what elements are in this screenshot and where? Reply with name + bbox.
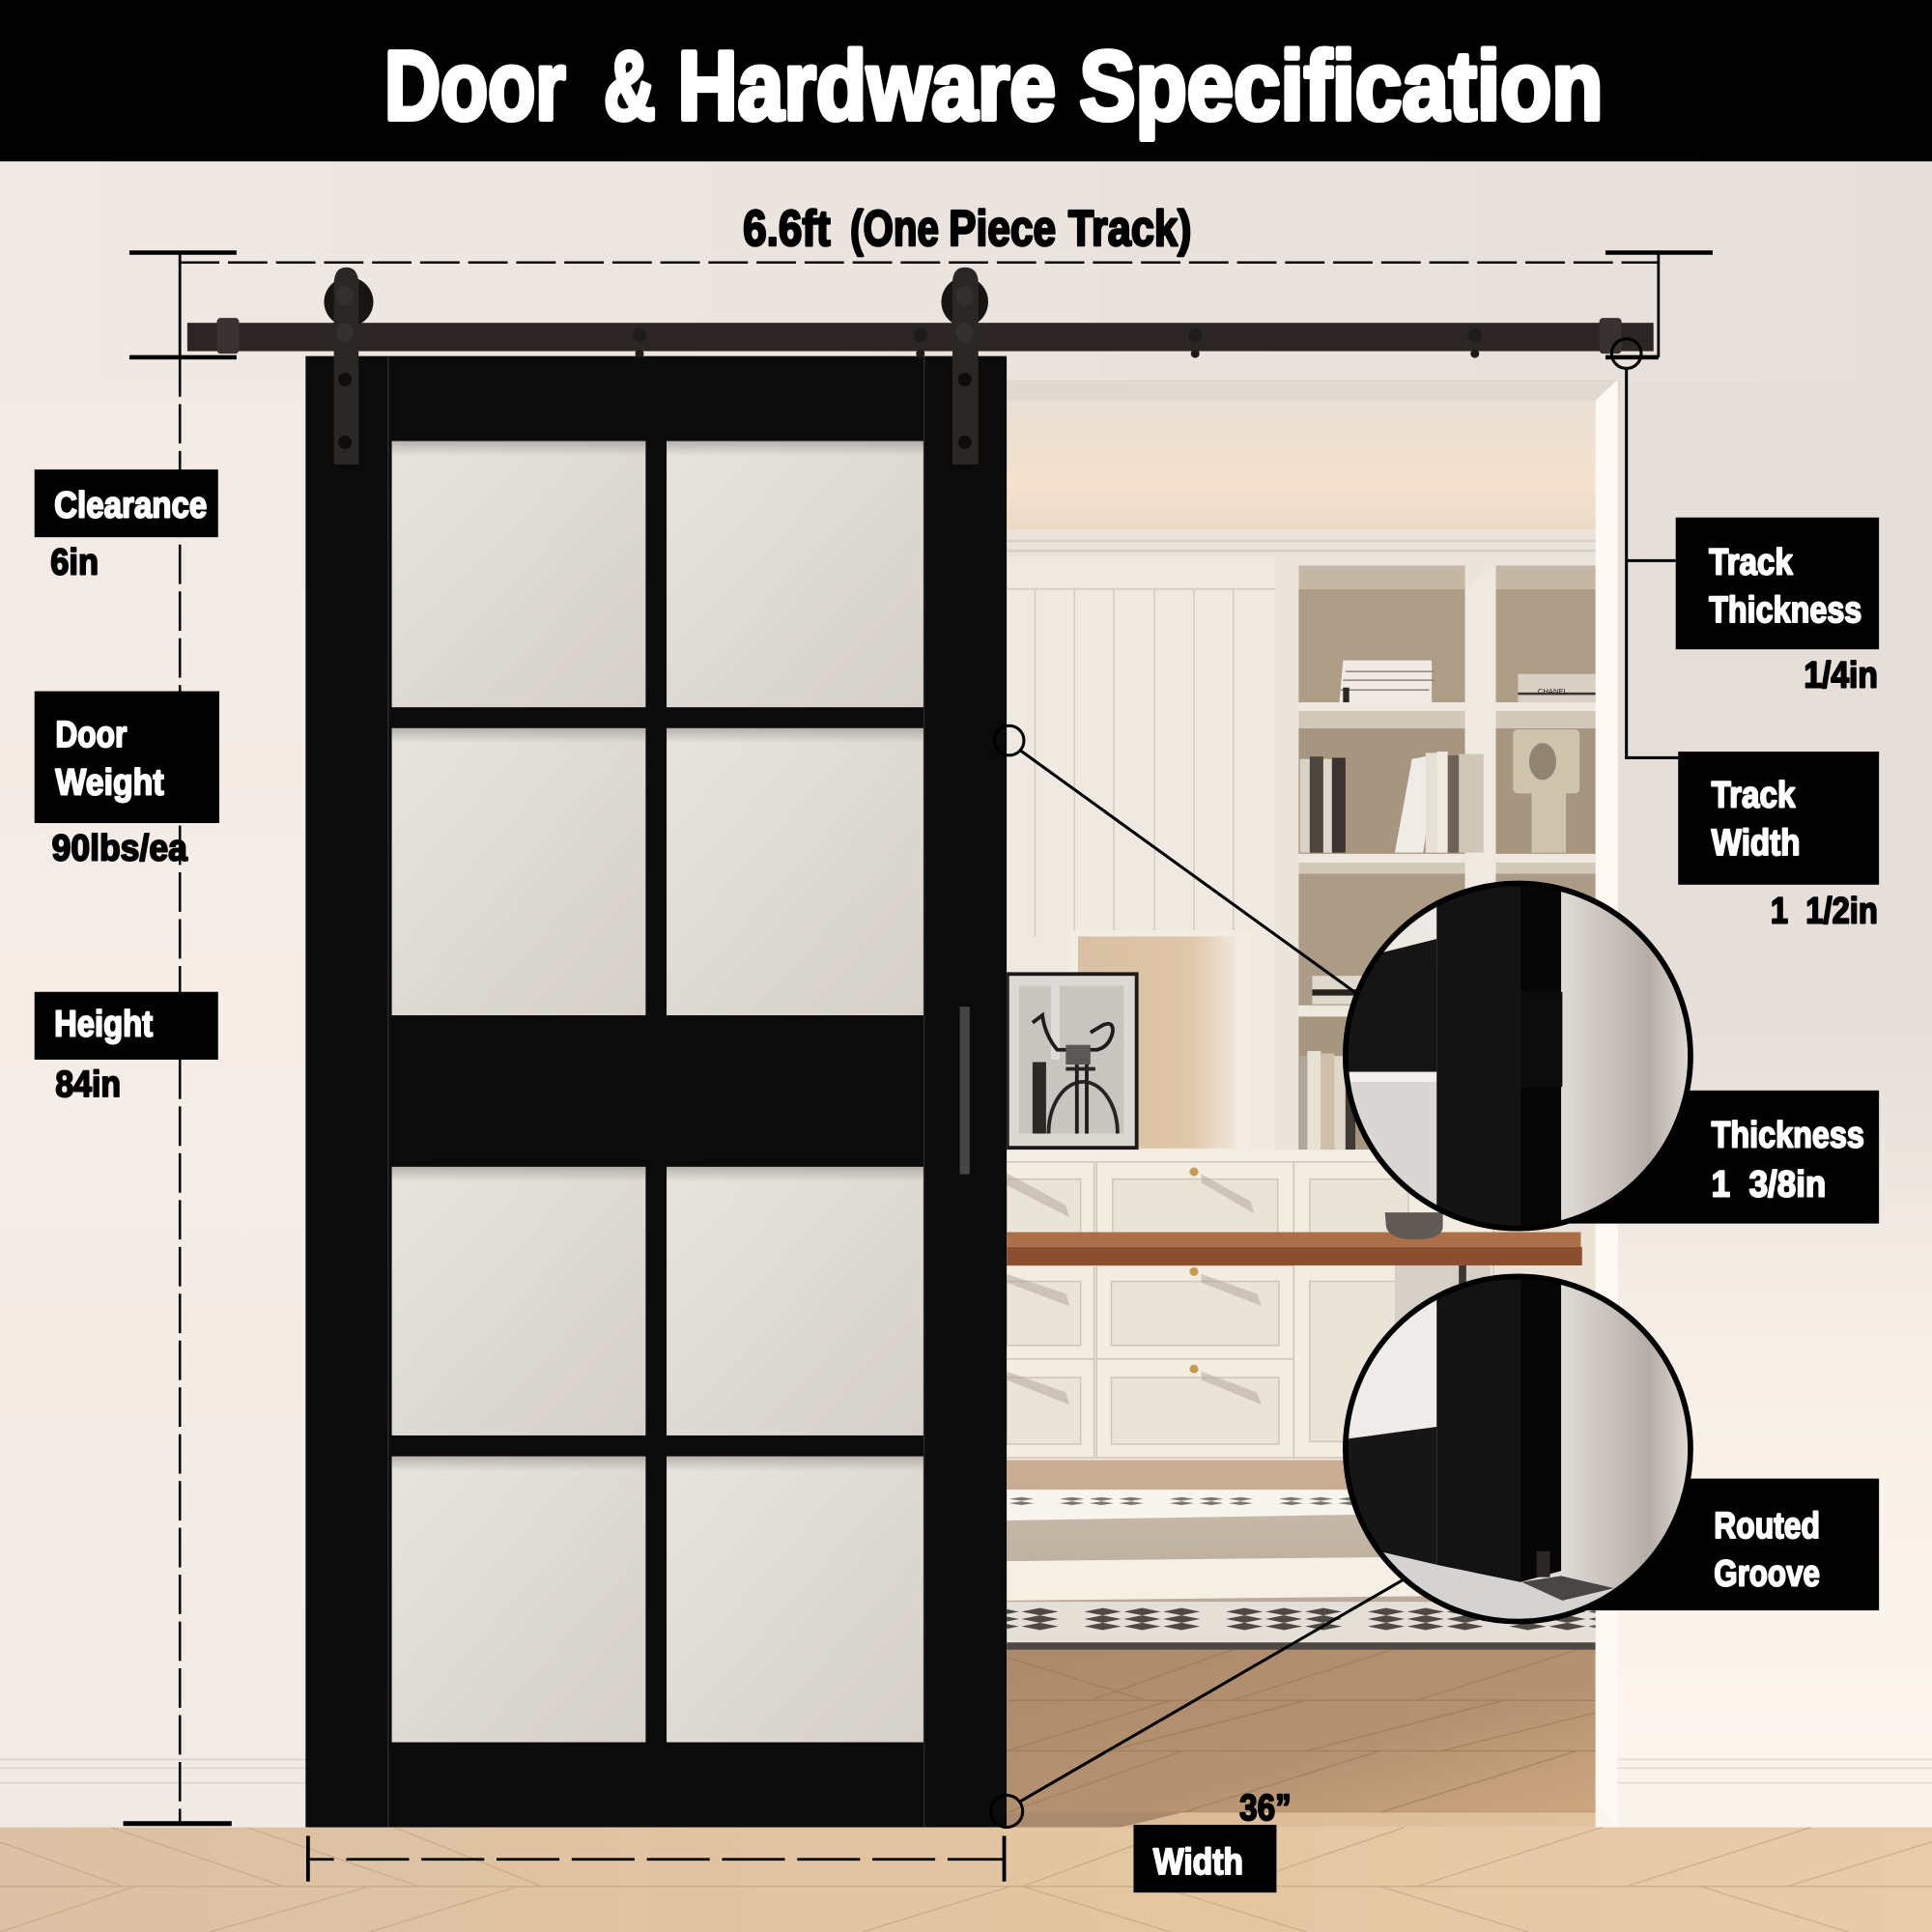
detail circle: routed groove [1346, 1276, 1690, 1627]
room seen through the doorway [1005, 401, 1596, 1829]
room floor [1007, 1650, 1596, 1829]
label: routed groove: Groove [1714, 1553, 1820, 1595]
bookcase [1275, 557, 1596, 1157]
track stoppers [216, 318, 1622, 354]
track length dimension: 6.6ft [743, 201, 831, 257]
leader: door top edge to detail [994, 725, 1358, 994]
label: door weight [35, 692, 219, 868]
label: track thickness [1676, 518, 1879, 696]
label: thickness [1547, 1091, 1879, 1224]
track length dimension: (One [850, 201, 939, 257]
track length dimension: Piece [949, 201, 1056, 257]
title bar: & [604, 33, 656, 141]
label: thickness: 1 3/8in [1712, 1164, 1826, 1206]
title bar: Specification [1079, 33, 1603, 141]
label: height [35, 992, 218, 1105]
large framed art [1074, 930, 1236, 1149]
door width dimension [308, 1836, 1005, 1882]
leader: door bottom edge to detail [991, 1575, 1412, 1828]
label: clearance [35, 469, 218, 582]
label: door weight: Door [55, 714, 127, 755]
cup [1385, 1212, 1443, 1239]
title bar: Hardware [678, 33, 1056, 141]
sliding track [187, 318, 1654, 358]
label: thickness: Thickness [1712, 1114, 1864, 1155]
label: track thickness: Thickness [1709, 589, 1861, 631]
ceiling [1007, 401, 1596, 529]
left hanger [324, 268, 373, 465]
skirting boards [0, 1758, 1932, 1828]
label: clearance: Clearance [54, 485, 207, 526]
label: height: 84in [55, 1064, 121, 1105]
wooden floor [0, 1828, 1932, 1932]
glass panes [392, 441, 924, 1743]
label: width: Width [1153, 1841, 1243, 1883]
label: door weight: 90lbs/ea [52, 827, 188, 868]
panelled wall [1007, 557, 1296, 1161]
label: track width: 1 1/2in [1771, 890, 1878, 931]
framed bicycle photo [1007, 972, 1139, 1151]
wood table [1007, 1233, 1582, 1285]
track length dimension [129, 201, 1713, 357]
right hanger [941, 268, 988, 465]
label: width [1133, 1787, 1292, 1892]
track leader lines [1611, 339, 1678, 757]
cabinets [1005, 1150, 1493, 1460]
label: door weight: Weight [55, 762, 164, 804]
detail circle: thickness [1346, 882, 1690, 1230]
title bar [0, 0, 1932, 161]
books: CHANEL [1538, 687, 1568, 696]
crown moulding [1007, 529, 1596, 557]
barn door [305, 356, 1007, 1828]
back wall behind cabinets [1493, 1223, 1596, 1292]
label: clearance: 6in [50, 541, 99, 582]
rug [1007, 1490, 1596, 1650]
track length dimension: Track) [1068, 201, 1191, 257]
sculpture [1513, 729, 1579, 853]
title bar: Door [384, 33, 565, 141]
label: track thickness: 1/4in [1804, 655, 1878, 696]
label: track width: Width [1712, 822, 1801, 864]
label: track thickness: Track [1709, 541, 1793, 582]
door handle [960, 1007, 970, 1175]
label: width: 36” [1239, 1787, 1292, 1829]
label: routed groove [1571, 1479, 1879, 1610]
doorway frame [1007, 380, 1620, 1828]
books [1300, 661, 1596, 1150]
label: height: Height [54, 1004, 153, 1045]
back floor [1007, 1461, 1348, 1490]
label: track width [1678, 752, 1879, 931]
label: routed groove: Routed [1714, 1505, 1820, 1547]
door height dimension [124, 357, 232, 1824]
label: track width: Track [1712, 774, 1796, 815]
